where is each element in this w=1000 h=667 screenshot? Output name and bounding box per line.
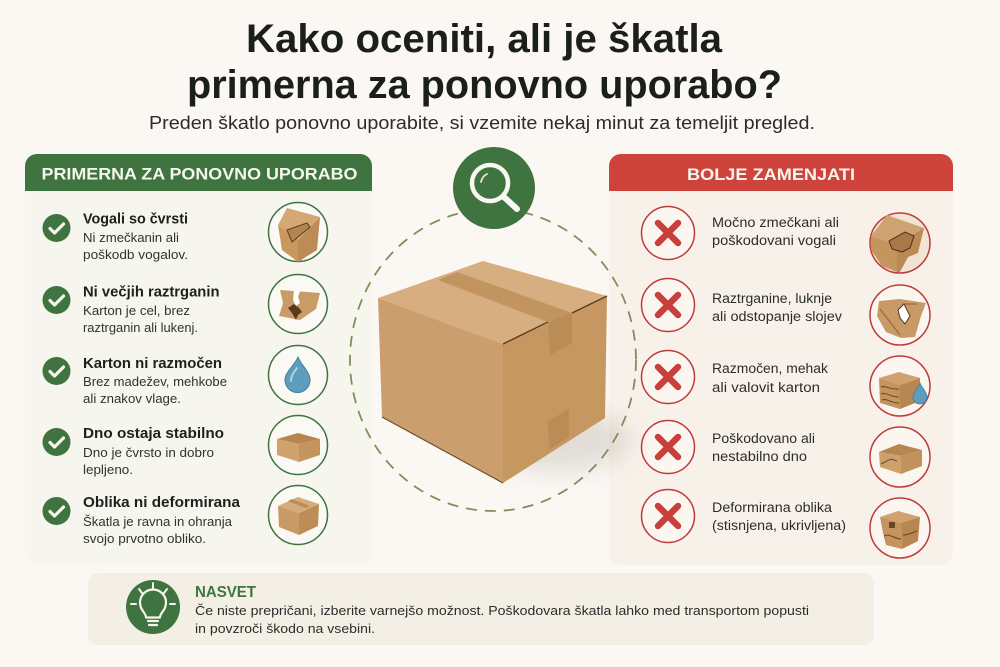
item: not soaked: ali znakov vlage. bbox=[83, 391, 181, 406]
item: damaged bottom bbox=[642, 420, 930, 487]
item: not soaked: Karton ni razmočen bbox=[83, 355, 222, 372]
panel: better to replace bbox=[609, 154, 953, 565]
icon: light bulb bbox=[126, 580, 180, 634]
item: bottom stable: Dno je čvrsto in dobro bbox=[83, 445, 214, 460]
item: deformed shape: (stisnjena, ukrivljena) bbox=[712, 518, 846, 533]
title bbox=[187, 17, 782, 107]
subtitle: Preden škatlo ponovno uporabite, si vzemite nekaj minut za temeljit pregled. bbox=[149, 112, 815, 133]
item: corners: Ni zmečkanin ali bbox=[83, 230, 179, 245]
callout: tip: NASVET bbox=[195, 584, 257, 601]
item: tears and holes: ali odstopanje slojev bbox=[712, 309, 842, 324]
item: shape intact: Škatla je ravna in ohranja bbox=[83, 514, 233, 529]
callout: tip bbox=[88, 573, 874, 645]
callout: tip: Če niste prepričani, izberite varnejšo možnost. Poškodovara škatla lahko med transportom popusti bbox=[195, 603, 809, 618]
panel header: replace: BOLJE ZAMENJATI bbox=[687, 165, 855, 184]
item: damaged bottom: nestabilno dno bbox=[712, 449, 807, 464]
item: not soaked: Brez madežev, mehkobe bbox=[83, 374, 227, 389]
title: Kako oceniti, ali je škatla bbox=[246, 17, 723, 61]
icon: magnifying glass bbox=[453, 147, 535, 229]
item: corners: poškodb vogalov. bbox=[83, 247, 188, 262]
item: tears: raztrganin ali lukenj. bbox=[83, 320, 198, 335]
item: tears: Ni večjih raztrganin bbox=[83, 284, 220, 300]
callout: tip: in povzroči škodo na vsebini. bbox=[195, 621, 375, 636]
item: tears and holes bbox=[642, 278, 930, 345]
item: corners bbox=[42, 202, 328, 262]
item: soaked bbox=[642, 350, 930, 416]
item: shape intact: Oblika ni deformirana bbox=[83, 494, 241, 511]
panel header: replace bbox=[609, 154, 953, 191]
panel header: suitable: PRIMERNA ZA PONOVNO UPORABO bbox=[42, 164, 358, 184]
item: corners: Vogali so čvrsti bbox=[83, 210, 188, 228]
box tape bbox=[438, 272, 572, 450]
item: damaged bottom: Poškodovano ali bbox=[712, 431, 815, 446]
dashed inspection circle bbox=[350, 209, 636, 511]
item: deformed shape: Deformirana oblika bbox=[712, 500, 833, 515]
item: deformed shape bbox=[642, 490, 930, 558]
item: shape intact: svojo prvotno obliko. bbox=[83, 531, 206, 546]
item: bottom stable: Dno ostaja stabilno bbox=[83, 425, 224, 442]
item: crushed corners: poškodovani vogali bbox=[712, 233, 836, 248]
item: crushed corners: Močno zmečkani ali bbox=[712, 215, 839, 230]
item: soaked: Razmočen, mehak bbox=[712, 361, 828, 376]
item: bottom stable: lepljeno. bbox=[83, 462, 133, 477]
item: shape intact bbox=[42, 486, 328, 546]
item: not soaked bbox=[42, 346, 328, 406]
item: bottom stable bbox=[42, 416, 328, 477]
item: soaked: ali valovit karton bbox=[712, 380, 820, 395]
item: tears bbox=[42, 274, 328, 335]
panel header: suitable bbox=[25, 154, 372, 191]
item: tears and holes: Raztrganine, luknje bbox=[712, 291, 832, 306]
title: primerna za ponovno uporabo? bbox=[187, 63, 782, 107]
item: crushed corners bbox=[642, 206, 930, 273]
item: tears: Karton je cel, brez bbox=[83, 303, 190, 318]
icon: cardboard box bbox=[378, 261, 630, 483]
panel: suitable for reuse bbox=[25, 154, 372, 565]
